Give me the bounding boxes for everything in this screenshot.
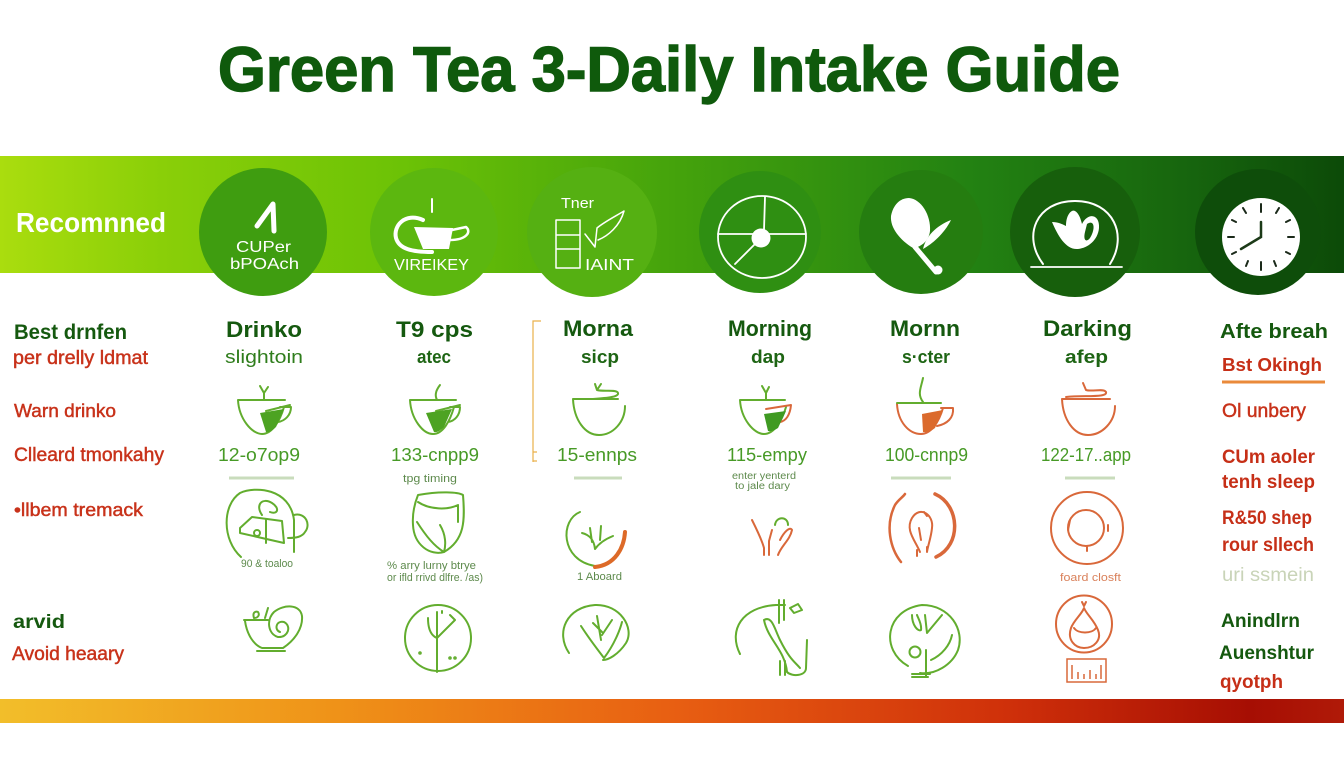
icon: cup 3 [573,384,625,435]
number labels row [218,445,1131,465]
icon: cup 5 [897,378,953,434]
divider bracket beside column 3 [533,321,541,462]
footer gradient bar [0,699,1344,723]
icon: sprout branches [752,518,792,555]
icon: cup 6 [1062,383,1115,435]
panel: right labels column [1219,321,1328,693]
icon: circle 1 number badge: CUPer [236,239,292,256]
caption: icon row 1 column 2: or ifld rrivd dlfre. /as) [387,572,483,584]
icon: circle 1 number badge: bPOAch [230,256,299,273]
panel: left labels column: Best drnfen [14,321,127,344]
caption: icon row 1 column 2 [387,560,483,584]
icon: circle 4 wheel [699,171,821,293]
panel: green header band [0,156,1344,273]
icon: circle 2 tea cup: VIREIKEY [394,257,469,274]
panel: right labels column: tenh sleep [1222,472,1315,493]
small notes under numbers: to jale dary [735,481,790,492]
small notes under numbers: tpg timing [403,473,457,485]
icon: round leaf [563,605,629,660]
panel: left labels column: Warn drinko [14,401,116,421]
panel: right labels column: rour sllech [1222,535,1314,556]
icon: circle 5 leaf sprout [859,170,983,294]
icon: circle with palm [890,605,960,677]
icon: orange target ring [1051,492,1123,564]
panel: left labels column: Avoid heaary [12,644,125,665]
column 5 heading [890,316,960,367]
panel: left labels column [12,321,165,665]
caption: icon row 1 column 3: 1 Aboard [577,571,622,583]
title: Green Tea 3-Daily Intake Guide [218,35,1120,105]
column 5 heading: Mornn [890,316,960,341]
icon: herbs and cup outline [227,490,308,557]
icon: circle 3 checklist and leaf: Tner [561,195,594,212]
icon: bowl with leaf [244,606,302,651]
number labels row: 100-cnnp9 [885,445,968,465]
icon: orange drop ring [1056,596,1112,652]
icon: cup 1 [238,386,291,434]
icon: circle 7 clock [1195,169,1321,295]
panel: right labels column: uri ssmein [1222,565,1314,586]
small notes under numbers [403,471,796,492]
column 1 heading [225,317,303,367]
panel: right labels column: Bst Okingh [1222,355,1322,375]
column 3 heading: Morna [563,316,634,341]
column 4 heading: dap [751,347,785,367]
panel: right labels column: Afte breah [1220,321,1328,343]
caption: icon row 1 column 1: 90 & toaloo [241,558,293,570]
icon: circle 1 number badge [199,168,327,296]
icon: cup 2 [410,385,460,434]
number labels row: 15-ennps [557,445,637,465]
panel: right labels column: Anindlrn [1221,611,1300,632]
panel: right labels column: CUm aoler [1222,447,1316,468]
caption: icon row 1 column 2: % arry lurny btrye [387,560,476,572]
panel: right labels column: qyotph [1220,672,1283,693]
icon: cup 4 [740,386,791,434]
column 4 heading [728,316,812,367]
panel: left labels column: Clleard tmonkahy [14,445,165,466]
column 3 heading: sicp [581,347,619,367]
panel: right labels column: Ol unbery [1222,401,1307,422]
icon: sprout ring [566,512,625,567]
icon: small bar chart [1067,659,1106,682]
heading: recommended: Recomnned [16,207,166,238]
panel: left labels column: arvid [13,612,65,633]
icon: circle 2 tea cup [370,168,498,296]
icon: open arc figure [736,600,807,675]
number labels row: 133-cnpp9 [391,445,479,465]
small notes under numbers: enter yenterd [732,471,796,482]
caption: target ring: foard closft [1060,572,1121,584]
panel: left labels column: per drelly ldmat [13,348,149,369]
column 1 heading: slightoin [225,347,303,367]
column 2 heading [396,317,473,367]
icon: circle 6 teapot dome [1010,167,1140,297]
column 1 heading: Drinko [226,317,302,342]
column 6 heading: afep [1065,347,1108,367]
icon: circle 3 checklist and leaf: IAINT [585,257,634,274]
panel: right labels column: R&50 shep [1222,508,1312,529]
column 3 heading [563,316,634,367]
column 2 heading: T9 cps [396,317,473,342]
column 4 heading: Morning [728,316,812,341]
panel: left labels column: •llbem tremack [14,500,144,520]
icon: orange bulb ring [890,494,955,562]
icon: circle 3 checklist and leaf [527,167,657,297]
column 2 heading: atec [417,347,451,367]
column 5 heading: s·cter [902,347,950,367]
number labels row: 122-17..app [1041,445,1131,465]
column 6 heading: Darking [1043,316,1132,341]
number labels row: 12-o7op9 [218,445,300,465]
icon: round tree [405,605,471,672]
panel: right labels column: Auenshtur [1219,643,1315,664]
number labels row: 115-empy [727,445,807,465]
icon: tall cup outline [413,492,464,553]
column 6 heading [1043,316,1132,367]
